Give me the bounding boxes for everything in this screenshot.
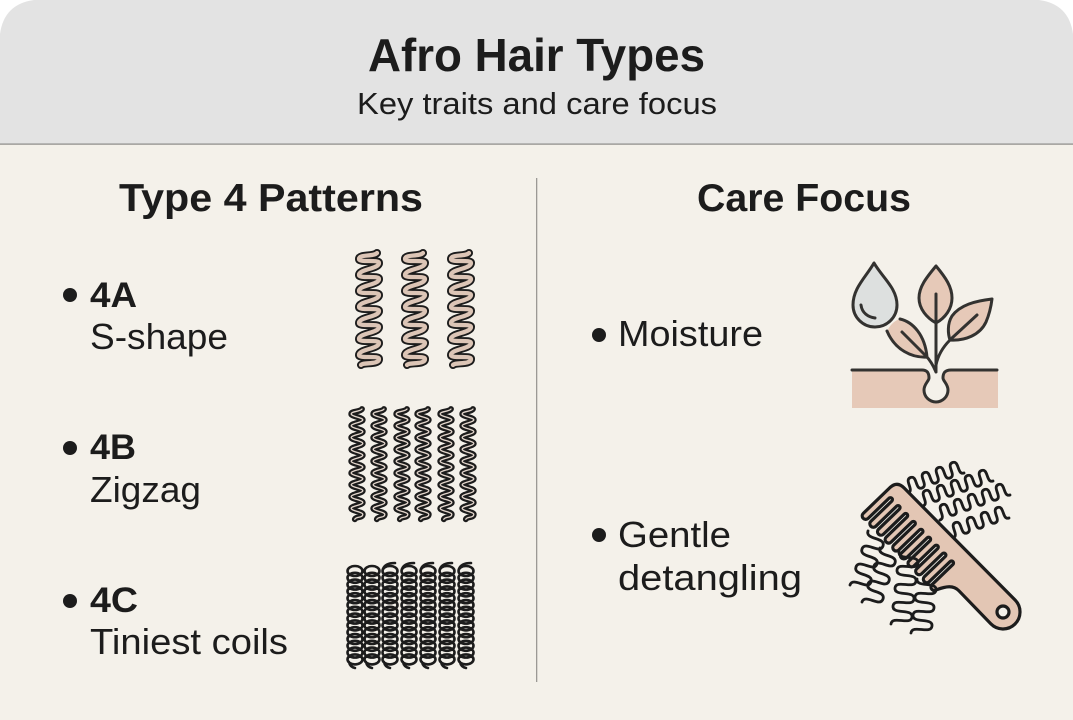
item: gentle detangling: detangling <box>618 557 802 598</box>
icon: comb with curly hair <box>850 462 1027 649</box>
item: 4C label <box>63 581 288 662</box>
item: 4B label: Zigzag <box>90 469 201 510</box>
icon: 4A S-shaped strands <box>359 253 471 365</box>
item: 4A label: 4A <box>90 276 137 315</box>
item: 4C label: Tiniest coils <box>90 621 288 662</box>
header band <box>0 0 1073 145</box>
item: 4A label: S-shape <box>90 316 228 357</box>
heading: type 4 patterns: Type 4 Patterns <box>119 177 423 220</box>
icon: water drop and plant <box>852 263 998 408</box>
item: gentle detangling: Gentle <box>618 514 731 555</box>
title: Afro Hair Types <box>368 29 705 81</box>
item: 4B label <box>63 428 201 510</box>
item: gentle detangling <box>592 514 802 598</box>
item: 4C label: 4C <box>90 581 138 620</box>
item: 4B label: 4B <box>90 428 136 467</box>
panel: care focus <box>592 177 1027 649</box>
item: 4A label <box>63 276 228 357</box>
icon: 4C tight coils <box>348 563 474 668</box>
column divider <box>536 178 537 682</box>
panel: type 4 patterns <box>63 177 474 668</box>
subtitle: Key traits and care focus <box>357 86 717 121</box>
icon: 4B zigzag strands <box>351 409 474 519</box>
heading: care focus: Care Focus <box>697 177 911 220</box>
item: moisture: Moisture <box>618 313 763 354</box>
